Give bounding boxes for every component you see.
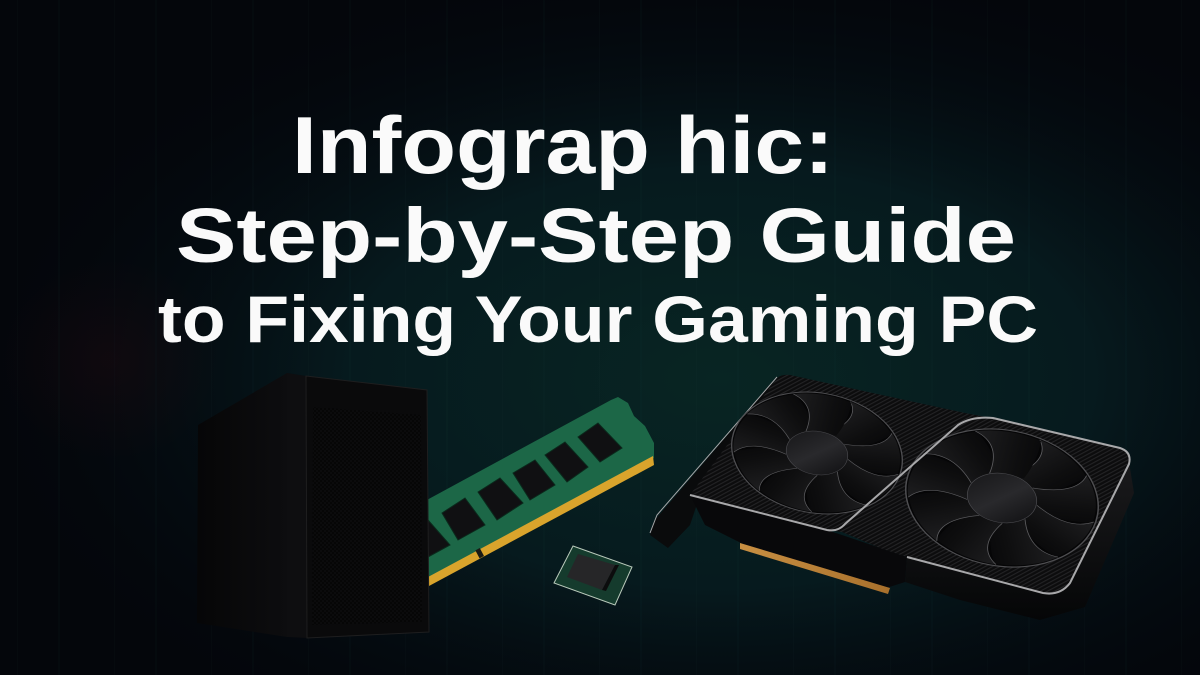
finned shroud xyxy=(690,375,1129,594)
chip die xyxy=(567,554,615,590)
RAM circuit board xyxy=(425,397,654,578)
gold PCIe connector xyxy=(740,543,890,594)
chip substrate xyxy=(554,546,632,605)
small processor chip xyxy=(554,546,632,605)
title line 1: Infograp hic: xyxy=(292,101,834,191)
title line 3: to Fixing Your Gaming PC xyxy=(158,282,1038,356)
RAM gold contacts xyxy=(428,456,654,586)
title xyxy=(158,101,1038,356)
silver trim xyxy=(690,418,1130,594)
left fan xyxy=(701,361,934,541)
PC tower case xyxy=(197,373,429,638)
RAM module xyxy=(425,397,654,586)
RAM notch xyxy=(475,548,484,558)
case mesh xyxy=(312,407,422,625)
card side face xyxy=(905,462,1134,620)
card lower body xyxy=(690,495,907,590)
case side panel xyxy=(197,373,287,637)
right fan xyxy=(871,394,1134,598)
graphics card xyxy=(650,361,1134,620)
case front panel xyxy=(306,376,429,638)
PCI bracket xyxy=(650,377,777,548)
title line 2: Step-by-Step Guide xyxy=(176,193,1016,279)
case front pillar xyxy=(287,373,307,638)
RAM chips xyxy=(428,423,622,557)
